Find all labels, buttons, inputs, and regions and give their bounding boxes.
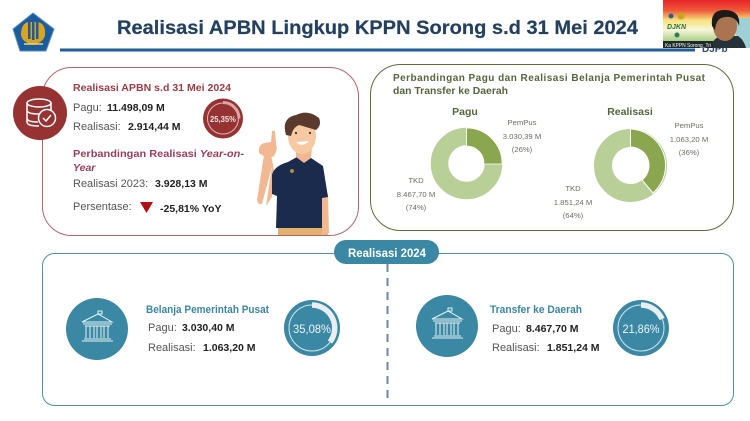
donut chart: pagu: 3.030,39 M (503, 132, 541, 141)
pagu value: 3.030,40 M (182, 322, 235, 334)
realisasi value: Realisasi: (492, 342, 540, 354)
panel: APBN realization (13, 68, 358, 236)
webcam overlay (663, 0, 750, 49)
heading: year-on-year: Perbandingan Realisasi Year-on- (73, 148, 242, 160)
progress ring 21,86% (613, 300, 669, 356)
partly hidden DJPb label: DJPb (702, 44, 728, 55)
donut chart: realisasi: (36%) (679, 148, 700, 157)
donut chart: pagu (397, 106, 541, 212)
icon: government building (416, 295, 478, 357)
pagu value: 11.498,09 M (107, 102, 165, 114)
persentase label: Persentase: (73, 201, 132, 213)
donut chart: pagu: (74%) (406, 203, 427, 212)
donut chart: realisasi: 1.063,20 M (670, 135, 708, 144)
realisasi value: 1.851,24 M (547, 342, 600, 354)
donut chart: pagu: TKD (408, 176, 424, 185)
panel heading: dan Transfer ke Daerah (393, 86, 508, 97)
center divider (386, 264, 388, 400)
webcam overlay: DJKN (667, 24, 687, 31)
donut chart: pagu: Pagu (452, 106, 478, 118)
section heading: Belanja Pemerintah Pusat (146, 304, 269, 316)
heading: realization: Realisasi APBN s.d 31 Mei 2024 (73, 82, 231, 94)
realisasi value: 1.063,20 M (203, 342, 256, 354)
donut chart: realisasi (554, 106, 708, 220)
donut chart: realisasi: PemPus (674, 121, 704, 130)
progress ring 35,08%: 35,08% (293, 322, 331, 336)
realisasi value: Realisasi: (73, 121, 121, 133)
yoy value: -25,81% YoY (160, 203, 221, 215)
progress ring 35,08% (284, 300, 340, 356)
pagu value: Pagu: (148, 322, 177, 334)
progress ring 21,86%: 21,86% (622, 322, 660, 336)
pagu value: Pagu: (73, 102, 102, 114)
section: transfer ke daerah (416, 295, 669, 357)
character illustration (257, 113, 329, 235)
pagu value: Pagu: (492, 323, 521, 335)
section: belanja pemerintah pusat (66, 298, 340, 360)
realisasi value: Realisasi: (148, 342, 196, 354)
icon: government building (66, 298, 128, 360)
donut chart: realisasi: TKD (565, 184, 581, 193)
pagu value: 8.467,70 M (526, 323, 579, 335)
realisasi 2023 value: Realisasi 2023: (73, 178, 148, 190)
icon: ministry logo (13, 13, 54, 51)
donut chart: pagu: 8.467,70 M (397, 190, 435, 199)
title: Realisasi APBN Lingkup KPPN Sorong s.d 31 Mei 2024 (117, 17, 638, 39)
progress ring 25,35% (203, 98, 243, 138)
webcam overlay: Ka KPPN Sorong_Tri (665, 43, 711, 49)
realisasi 2023 value: 3.928,13 M (155, 178, 208, 190)
progress ring 25,35%: 25,35% (210, 115, 236, 124)
icon: database check (13, 86, 67, 140)
panel: budget comparison (370, 64, 734, 230)
donut chart: realisasi: (64%) (563, 211, 584, 220)
icon: down triangle (140, 202, 153, 213)
donut chart: pagu: PemPus (507, 118, 537, 127)
panel heading: Perbandingan Pagu dan Realisasi Belanja Pemerintah Pusat (393, 73, 706, 84)
panel: realisasi 2024 (42, 240, 734, 406)
pill heading: Realisasi 2024 (348, 246, 426, 260)
pill heading (334, 240, 439, 264)
heading: year-on-year: Year (73, 162, 96, 174)
donut chart: realisasi: Realisasi (607, 106, 653, 118)
realisasi value: 2.914,44 M (128, 121, 181, 133)
donut chart: pagu: (26%) (512, 145, 533, 154)
section heading: Transfer ke Daerah (490, 304, 582, 316)
donut chart: realisasi: 1.851,24 M (554, 198, 592, 207)
title underline (60, 48, 695, 52)
